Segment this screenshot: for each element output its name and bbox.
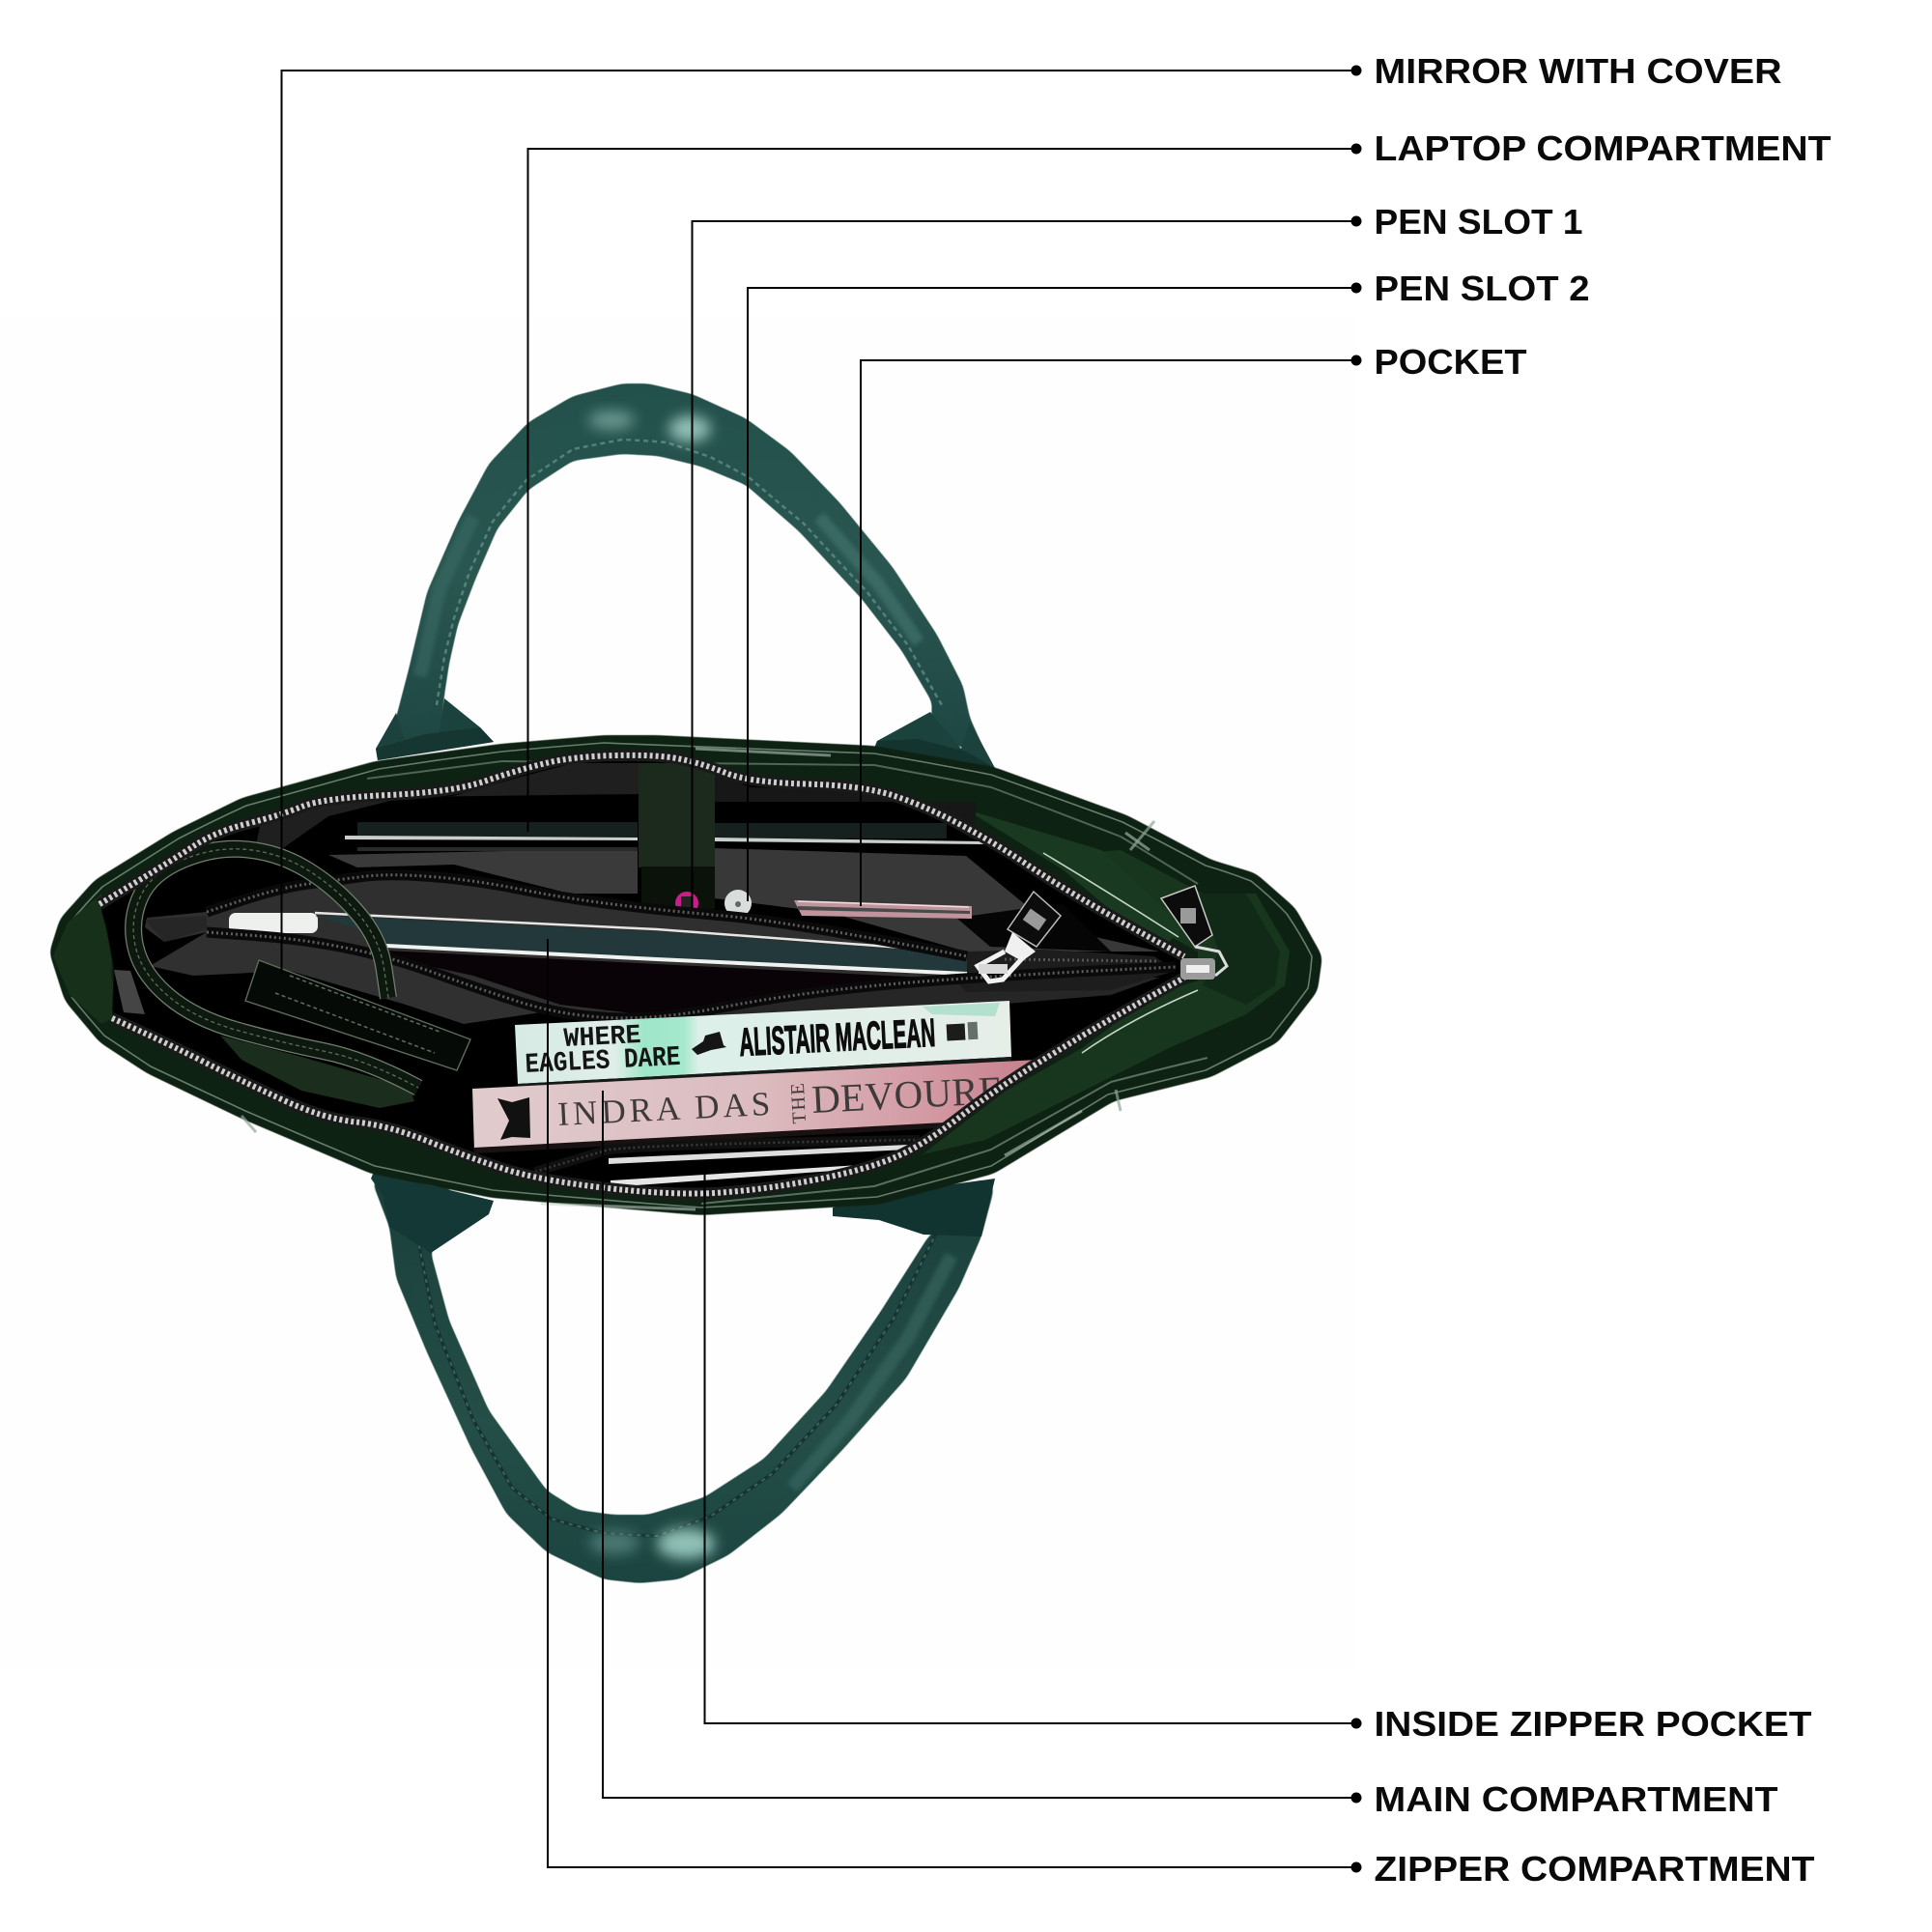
- book: The Devourers: THE: [787, 1083, 810, 1124]
- handle feet: [376, 698, 494, 760]
- laptop: [345, 822, 985, 851]
- leader line: zipper compartment: [548, 939, 1356, 1867]
- bag illustration: [49, 384, 1322, 1583]
- icon: publisher mark: [947, 1024, 965, 1041]
- icon: bird logo: [692, 1032, 726, 1055]
- label: pen slot 2: PEN SLOT 2: [1374, 269, 1590, 308]
- lining upper: [256, 763, 639, 850]
- book: Where Eagles Dare: EAGLES DARE: [525, 1041, 681, 1081]
- pens: [675, 890, 752, 917]
- phone in pocket: [794, 900, 972, 919]
- leader line: pocket: [861, 360, 1356, 906]
- inner zipped pouch: [145, 873, 1176, 1020]
- leather end panels: [923, 850, 1290, 1154]
- tablet device: [229, 913, 967, 1016]
- lining patch: [114, 970, 145, 1014]
- leader line: laptop compartment: [527, 149, 1356, 832]
- mirror with cover: [133, 849, 470, 1108]
- label: pen slot 1: PEN SLOT 1: [1374, 202, 1582, 242]
- label: main compartment: MAIN COMPARTMENT: [1374, 1779, 1778, 1819]
- book: The Devourers: DEVOURE: [810, 1067, 1004, 1122]
- label: zipper compartment: ZIPPER COMPARTMENT: [1374, 1849, 1814, 1889]
- label: laptop compartment: LAPTOP COMPARTMENT: [1374, 128, 1832, 168]
- top handle: [376, 384, 995, 776]
- book: The Devourers: INDRA DAS: [556, 1085, 771, 1133]
- label: mirror with cover: MIRROR WITH COVER: [1374, 51, 1781, 91]
- leader line: pen slot 1: [692, 221, 1356, 908]
- book: Where Eagles Dare: [515, 1001, 1011, 1088]
- leader line: main compartment: [603, 1091, 1356, 1798]
- leader line: mirror with cover: [282, 71, 1356, 974]
- handle feet: [371, 1172, 494, 1253]
- leather seams and highlights: [58, 743, 1312, 1209]
- bag body: [49, 735, 1322, 1215]
- zipper pulls: [978, 886, 1227, 981]
- leader line: inside zipper pocket: [705, 1174, 1356, 1723]
- inner zippers: [207, 875, 1176, 1018]
- label: inside zipper pocket: INSIDE ZIPPER POCKET: [1374, 1704, 1812, 1744]
- bottom handle: [371, 1172, 997, 1583]
- icon: black cat: [497, 1097, 530, 1140]
- leader line: pen slot 2: [748, 288, 1356, 901]
- label: pocket: POCKET: [1374, 342, 1527, 382]
- outer zippers: [99, 755, 1198, 1194]
- interior: [99, 754, 1184, 1196]
- book: Where Eagles Dare: ALISTAIR MACLEAN: [738, 1010, 936, 1065]
- book: Where Eagles Dare: WHERE: [563, 1021, 641, 1055]
- inside zipper pocket: [535, 1140, 920, 1187]
- elastic pen strap: [639, 763, 715, 909]
- book: The Devourers: [472, 1060, 1038, 1153]
